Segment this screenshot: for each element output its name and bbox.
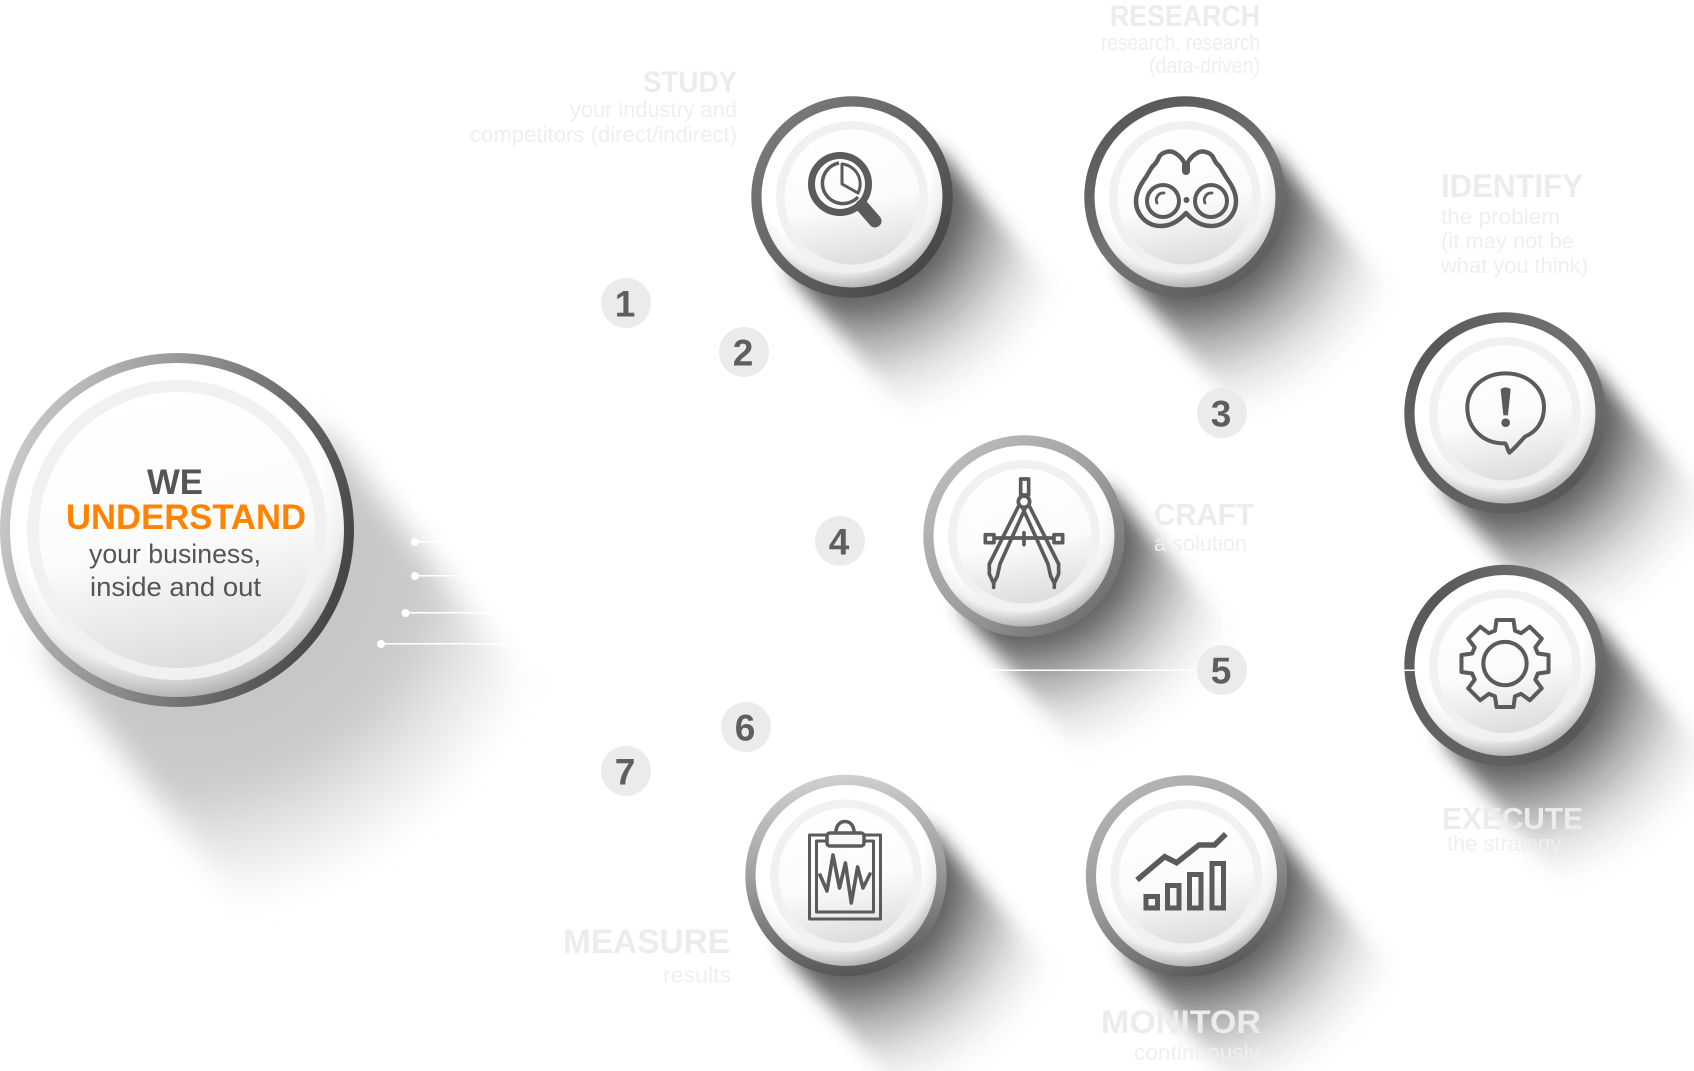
shadow: identify <box>1431 351 1694 650</box>
number badge 5: 5 <box>1211 650 1231 692</box>
number badge 5 <box>1197 645 1247 695</box>
icon: gear <box>1461 620 1549 707</box>
icon: binoculars <box>1136 152 1236 226</box>
icon: clipboard with pulse <box>810 822 880 919</box>
label: measure: results <box>663 962 731 988</box>
label: identify: (it may not be <box>1441 228 1574 254</box>
heading: we understand: your business, <box>89 539 261 569</box>
label: identify <box>1440 168 1588 278</box>
heading: we understand: inside and out <box>90 572 261 602</box>
number badge 6 <box>721 702 771 752</box>
label: identify: the problem <box>1441 204 1560 229</box>
panel: study button <box>751 96 953 298</box>
label: execute: the strategy <box>1447 831 1561 856</box>
label: monitor: continuously <box>1134 1040 1260 1065</box>
icon: drafting compass <box>985 479 1063 587</box>
icon: growth chart <box>1137 834 1226 908</box>
shadow: study <box>778 135 1073 434</box>
shadow: research <box>1111 135 1406 434</box>
heading: we understand <box>66 463 306 602</box>
number badge 6: 6 <box>735 708 755 748</box>
label: study <box>470 66 737 147</box>
shadow: execute <box>1431 603 1694 902</box>
shadow: monitor <box>1112 814 1407 1071</box>
label: monitor <box>1101 1004 1261 1065</box>
label: research: RESEARCH <box>1110 0 1260 33</box>
number badge 1: 1 <box>615 284 635 324</box>
label: craft: CRAFT <box>1154 497 1254 532</box>
label: identify: IDENTIFY <box>1441 168 1583 204</box>
number badge 1 <box>601 278 651 328</box>
number badge 3: 3 <box>1211 394 1231 434</box>
label: research: research, research <box>1101 30 1260 55</box>
panel: measure button <box>745 775 947 976</box>
label: measure <box>563 923 731 988</box>
label: identify: what you think) <box>1440 253 1588 278</box>
connector lines and dots <box>377 503 1205 671</box>
panel: research button <box>1084 96 1286 298</box>
number badge 4 <box>815 516 865 566</box>
heading: we understand: UNDERSTAND <box>66 498 306 537</box>
shadow: measure <box>772 814 1067 1071</box>
label: study: STUDY <box>643 66 737 99</box>
label: execute: EXECUTE <box>1442 801 1583 836</box>
icon: magnifier with pie chart <box>812 156 875 221</box>
shadow: craft <box>950 474 1245 773</box>
panel: craft button <box>923 435 1125 637</box>
panel: monitor button <box>1086 775 1287 977</box>
panel: main button <box>0 353 354 707</box>
label: research: (data-driven) <box>1149 53 1260 78</box>
number badge 7: 7 <box>615 752 635 792</box>
number badge 7 <box>601 746 651 796</box>
label: craft: a solution <box>1154 531 1247 556</box>
label: measure: MEASURE <box>563 923 730 961</box>
label: execute <box>1442 801 1583 856</box>
panel: identify button <box>1404 312 1606 514</box>
number badge 4: 4 <box>829 522 850 562</box>
number badge 2 <box>719 327 769 377</box>
label: craft <box>1154 497 1254 556</box>
number badge 3 <box>1197 388 1247 438</box>
panel: execute button <box>1404 565 1606 766</box>
icon: speech bubble with exclamation <box>1467 373 1544 453</box>
label: monitor: MONITOR <box>1101 1004 1261 1040</box>
label: study: your industry and <box>570 97 737 122</box>
label: study: competitors (direct/indirect) <box>470 122 737 147</box>
shadow: main button <box>35 419 556 944</box>
heading: we understand: WE <box>147 463 203 502</box>
label: research <box>1101 0 1260 78</box>
number badge 2: 2 <box>733 332 753 374</box>
